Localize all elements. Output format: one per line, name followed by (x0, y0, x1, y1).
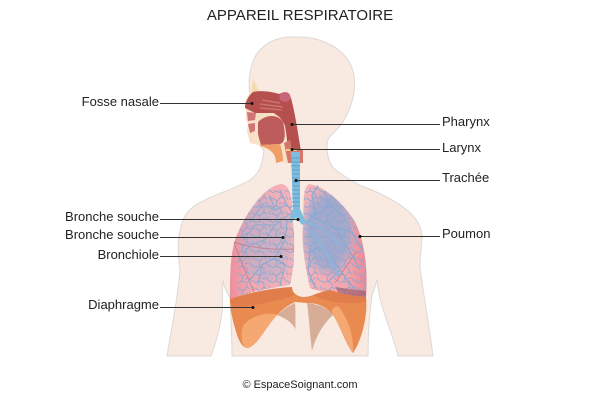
copyright: © EspaceSoignant.com (242, 379, 358, 391)
trachea rings (291, 158, 300, 206)
nasal turbinates (260, 100, 283, 110)
face profile skin (244, 92, 291, 163)
mouth front gap (253, 122, 260, 145)
right lung main bronchial trunks (305, 222, 340, 275)
bronchial tree left (238, 190, 296, 285)
leader dots (250, 102, 362, 309)
diaphragm (230, 287, 366, 353)
head and throat cavities (244, 79, 303, 163)
label: Bronche souche 1: Bronche souche (65, 209, 159, 224)
diaphragm light fold (242, 306, 353, 353)
diaphragm dome shadow (230, 287, 366, 308)
label: Trachée: Trachée (442, 170, 489, 185)
label: Fosse nasale: Fosse nasale (82, 94, 159, 109)
right lung blue-grey bronchial haze (304, 188, 368, 298)
label: Larynx: Larynx (442, 140, 482, 155)
sphenoid sinus (280, 92, 290, 102)
label: Pharynx: Pharynx (442, 114, 490, 129)
left lung (230, 184, 294, 299)
title: APPAREIL RESPIRATOIRE (207, 7, 393, 24)
palate cream band (254, 113, 276, 123)
mediastinum muscle left (277, 303, 296, 330)
right lung (303, 184, 367, 297)
left lung blue-grey bronchial haze (238, 190, 294, 298)
mediastinum muscle right (307, 303, 333, 351)
nasal cavity and pharynx wall (245, 91, 303, 163)
larynx (284, 140, 303, 163)
lung lobe fissures (234, 242, 356, 292)
body silhouette (167, 37, 433, 356)
label: Poumon: Poumon (442, 226, 490, 241)
lips (247, 112, 256, 133)
label: Diaphragme: Diaphragme (88, 297, 159, 312)
nasal bridge (251, 79, 260, 94)
label: Bronche souche 2: Bronche souche (65, 227, 159, 242)
bronchial tree right (306, 186, 362, 290)
neck orange tissue (260, 144, 283, 163)
leader lines (160, 104, 440, 308)
trachea (289, 152, 306, 225)
label: Bronchiole: Bronchiole (98, 247, 159, 262)
tongue and floor of mouth (258, 116, 285, 145)
